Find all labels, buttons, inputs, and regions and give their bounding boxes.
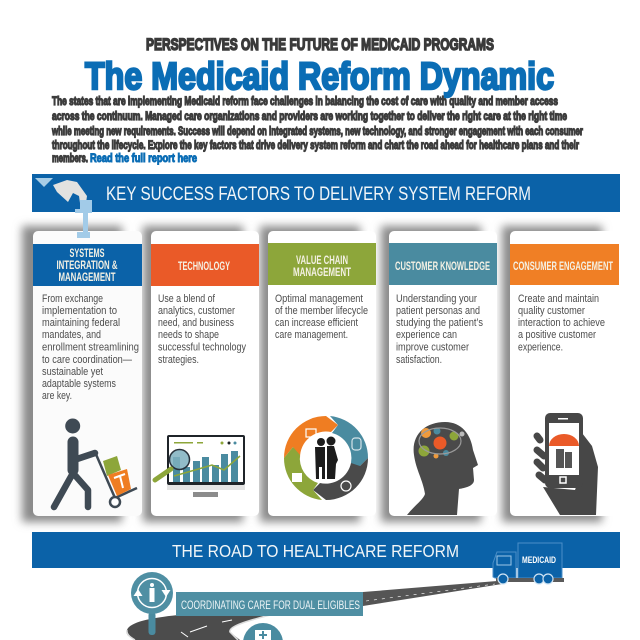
intro text block (51, 96, 583, 165)
panel: customer knowledge: CUSTOMER KNOWLEDGE (395, 261, 490, 273)
delivery truck: Medicaid: MEDICAID (522, 555, 556, 565)
panel: systems integration and management: adaptable systems (42, 378, 116, 390)
panel: consumer engagement: Create and maintain (518, 293, 599, 305)
panel: customer knowledge: experience can (396, 329, 457, 341)
icon: hand holding phone (537, 413, 598, 515)
page heading: kicker: PERSPECTIVES ON THE FUTURE OF MEDICAID PROGRAMS (146, 35, 494, 54)
panel: systems integration and management (33, 231, 142, 516)
panel: value chain management (268, 231, 376, 516)
delivery truck: Medicaid (493, 543, 564, 584)
panel: customer knowledge: improve customer (396, 342, 469, 354)
panel: systems integration and management: mandates, and (42, 329, 101, 341)
card shadows (22, 226, 602, 522)
panel: systems integration and management: enrollment streamlining (42, 342, 139, 354)
panel: systems integration and management: to care coordination— (42, 354, 133, 366)
hand holding key (35, 178, 92, 238)
panel: systems integration and management: implementation to (42, 305, 117, 317)
panel: consumer engagement: experience. (518, 342, 563, 354)
icon: person pushing hand truck (54, 418, 137, 507)
panel: systems integration and management: SYSTEMS (70, 248, 105, 260)
panel: systems integration and management: maintaining federal (42, 317, 120, 329)
title: The Medicaid Reform Dynamic (85, 56, 554, 98)
panel: consumer engagement (510, 231, 619, 516)
panel: technology: need, and business (158, 317, 234, 329)
top banner: KEY SUCCESS FACTORS TO DELIVERY SYSTEM REFORM (106, 184, 531, 205)
label: coordinating care for dual eligibles: COORDINATING CARE FOR DUAL ELIGIBLES (181, 600, 360, 612)
panel: customer knowledge: patient personas and (396, 305, 480, 317)
panel: systems integration and management: INTEGRATION & (56, 260, 118, 272)
panel: value chain management: care management. (275, 329, 348, 341)
panel: technology: successful technology (158, 342, 246, 354)
panel: systems integration and management: MANAGEMENT (58, 272, 116, 284)
panel: technology: needs to shape (158, 329, 219, 341)
panel: technology: Use a blend of (158, 293, 216, 305)
panel: systems integration and management: sustainable yet (42, 366, 104, 378)
panel: technology: TECHNOLOGY (178, 261, 230, 273)
panel: technology (151, 231, 259, 516)
panel: systems integration and management: are key. (42, 390, 72, 402)
label: coordinating care for dual eligibles (176, 592, 363, 616)
road (126, 581, 502, 640)
panel: customer knowledge: Understanding your (396, 293, 477, 305)
panel: consumer engagement: quality customer (518, 305, 585, 317)
panel: value chain management: VALUE CHAIN (296, 255, 348, 267)
panel: customer knowledge: satisfaction. (396, 354, 442, 366)
bottom banner (32, 532, 620, 568)
road sign: medical (243, 623, 283, 640)
panel: consumer engagement: a positive customer (518, 329, 596, 341)
panel: systems integration and management: From exchange (42, 293, 103, 305)
icon: head with gears (407, 422, 478, 515)
panel: value chain management: Optimal management (275, 293, 364, 305)
panel: technology: analytics, customer (158, 305, 235, 317)
panel: consumer engagement: interaction to achieve (518, 317, 605, 329)
panel: value chain management: MANAGEMENT (293, 267, 351, 279)
bottom banner: THE ROAD TO HEALTHCARE REFORM (172, 541, 459, 561)
panel: value chain management: of the member lifecycle (275, 305, 368, 317)
icon: lifecycle ring with seniors (284, 416, 368, 500)
intro text block: members. (52, 153, 88, 165)
intro text block: Read the full report here (90, 153, 197, 165)
panel: value chain management: can increase efficient (275, 317, 359, 329)
panel: customer knowledge (389, 231, 497, 516)
panel: customer knowledge: studying the patient’s (396, 317, 483, 329)
icon: monitor with bar chart and magnifier (155, 435, 245, 497)
panel: technology: strategies. (158, 354, 199, 366)
top banner (32, 174, 620, 212)
road sign: coordinating care (131, 572, 173, 635)
